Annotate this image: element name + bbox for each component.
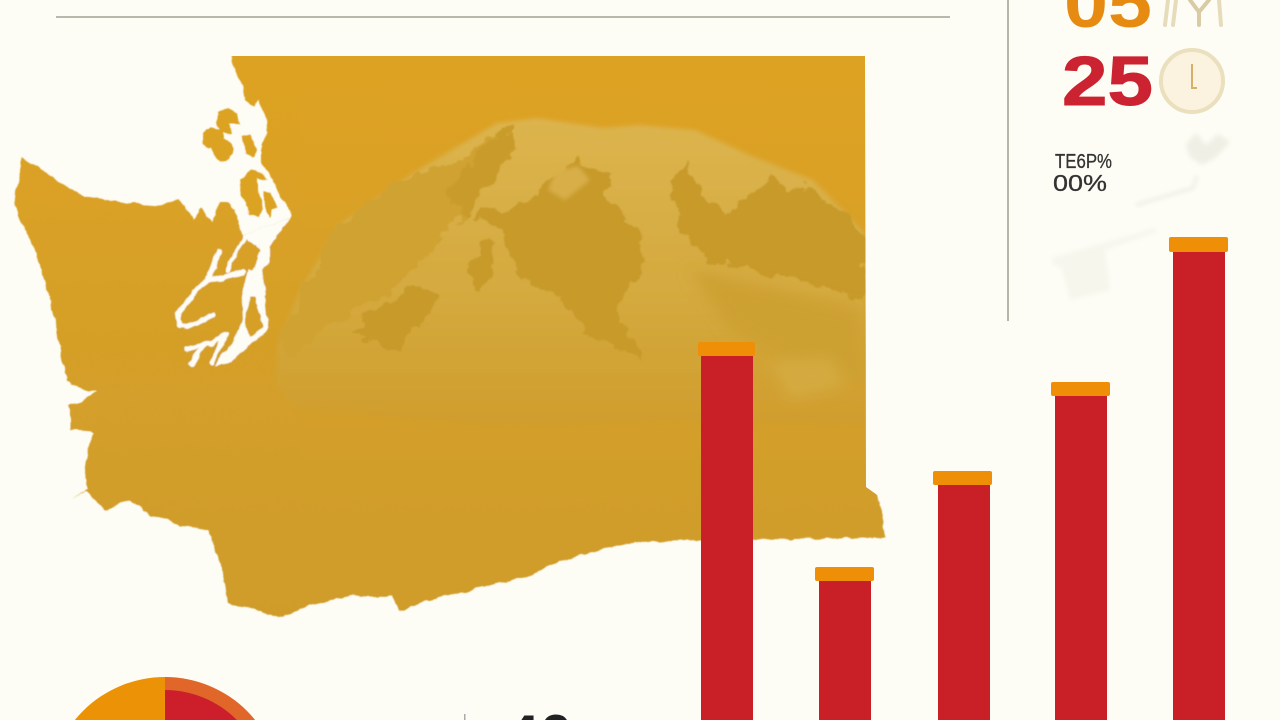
mountain: Rainier silhouette: [275, 118, 865, 425]
icon: clock: [1161, 50, 1223, 112]
bar 3: [933, 471, 992, 720]
bar 1: [698, 342, 755, 720]
small percentage text: TE6P%: [1055, 151, 1112, 173]
bottom tick: [464, 714, 466, 720]
bar 2: [815, 567, 874, 720]
small percentage text: 00%: [1053, 170, 1107, 196]
bar chart: [698, 237, 1228, 720]
bar 4: [1051, 382, 1110, 720]
bar 5: [1169, 237, 1228, 720]
header rule: [56, 16, 950, 18]
pie chart: [49, 677, 281, 720]
map: Washington state with Mount Rainier: [14, 50, 886, 618]
stat: red number: 25: [1062, 42, 1153, 120]
small percentage text: [1053, 151, 1112, 196]
column divider: [1007, 0, 1009, 321]
icon: cutlery: [1165, 0, 1221, 25]
faint illustration: tree and bench: [1052, 133, 1230, 300]
